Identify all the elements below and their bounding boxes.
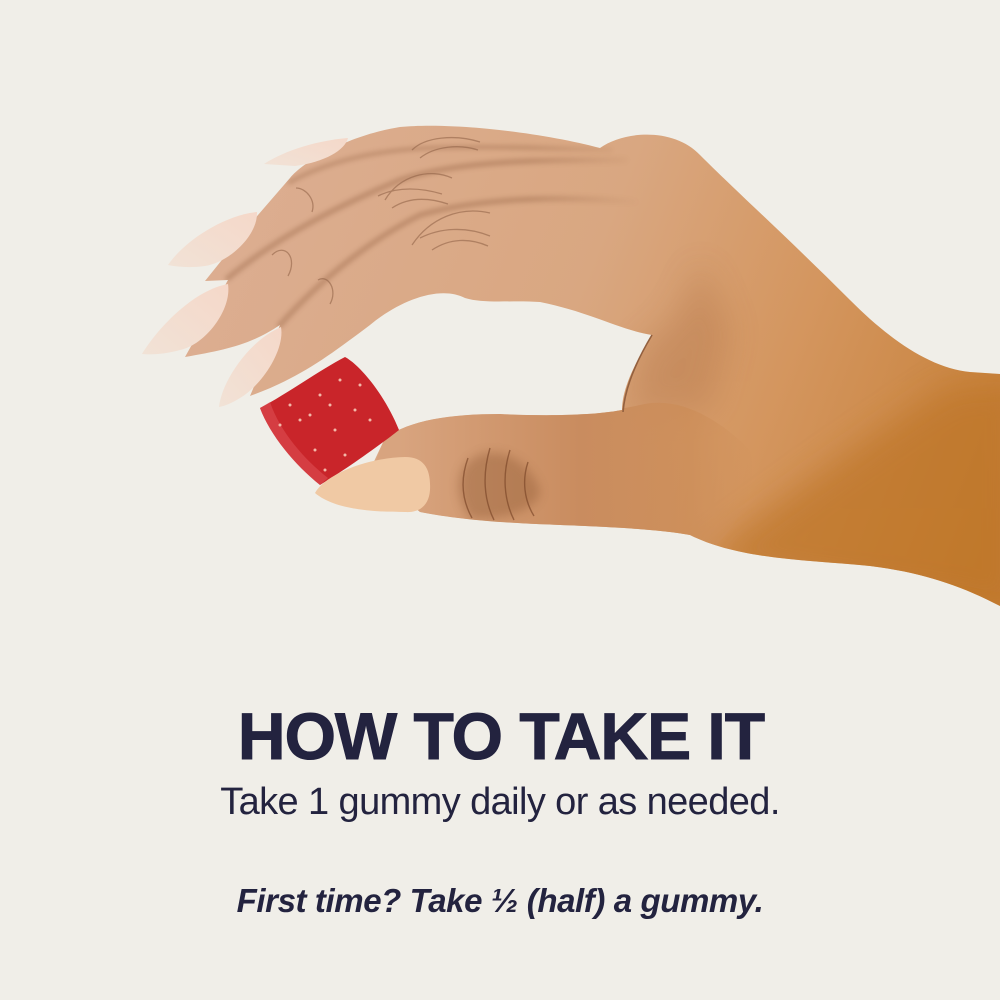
thumb nail (315, 457, 430, 512)
heading: HOW TO TAKE IT (238, 699, 764, 773)
wrist shading (700, 380, 1000, 620)
gummy (260, 357, 399, 485)
first time note: First time? Take ½ (half) a gummy. (237, 882, 763, 919)
thumb (399, 403, 716, 546)
web fold line (623, 335, 652, 412)
hand silhouette (185, 126, 1000, 606)
knuckle creases (272, 138, 490, 304)
palm crease shadow (628, 285, 726, 409)
hand holding gummy illustration (142, 126, 1000, 606)
thumb creases (463, 448, 534, 520)
instruction text: Take 1 gummy daily or as needed. (220, 781, 780, 823)
thumb knuckle shading (459, 453, 540, 519)
finger separation shadows (228, 147, 650, 325)
nails (142, 138, 348, 407)
